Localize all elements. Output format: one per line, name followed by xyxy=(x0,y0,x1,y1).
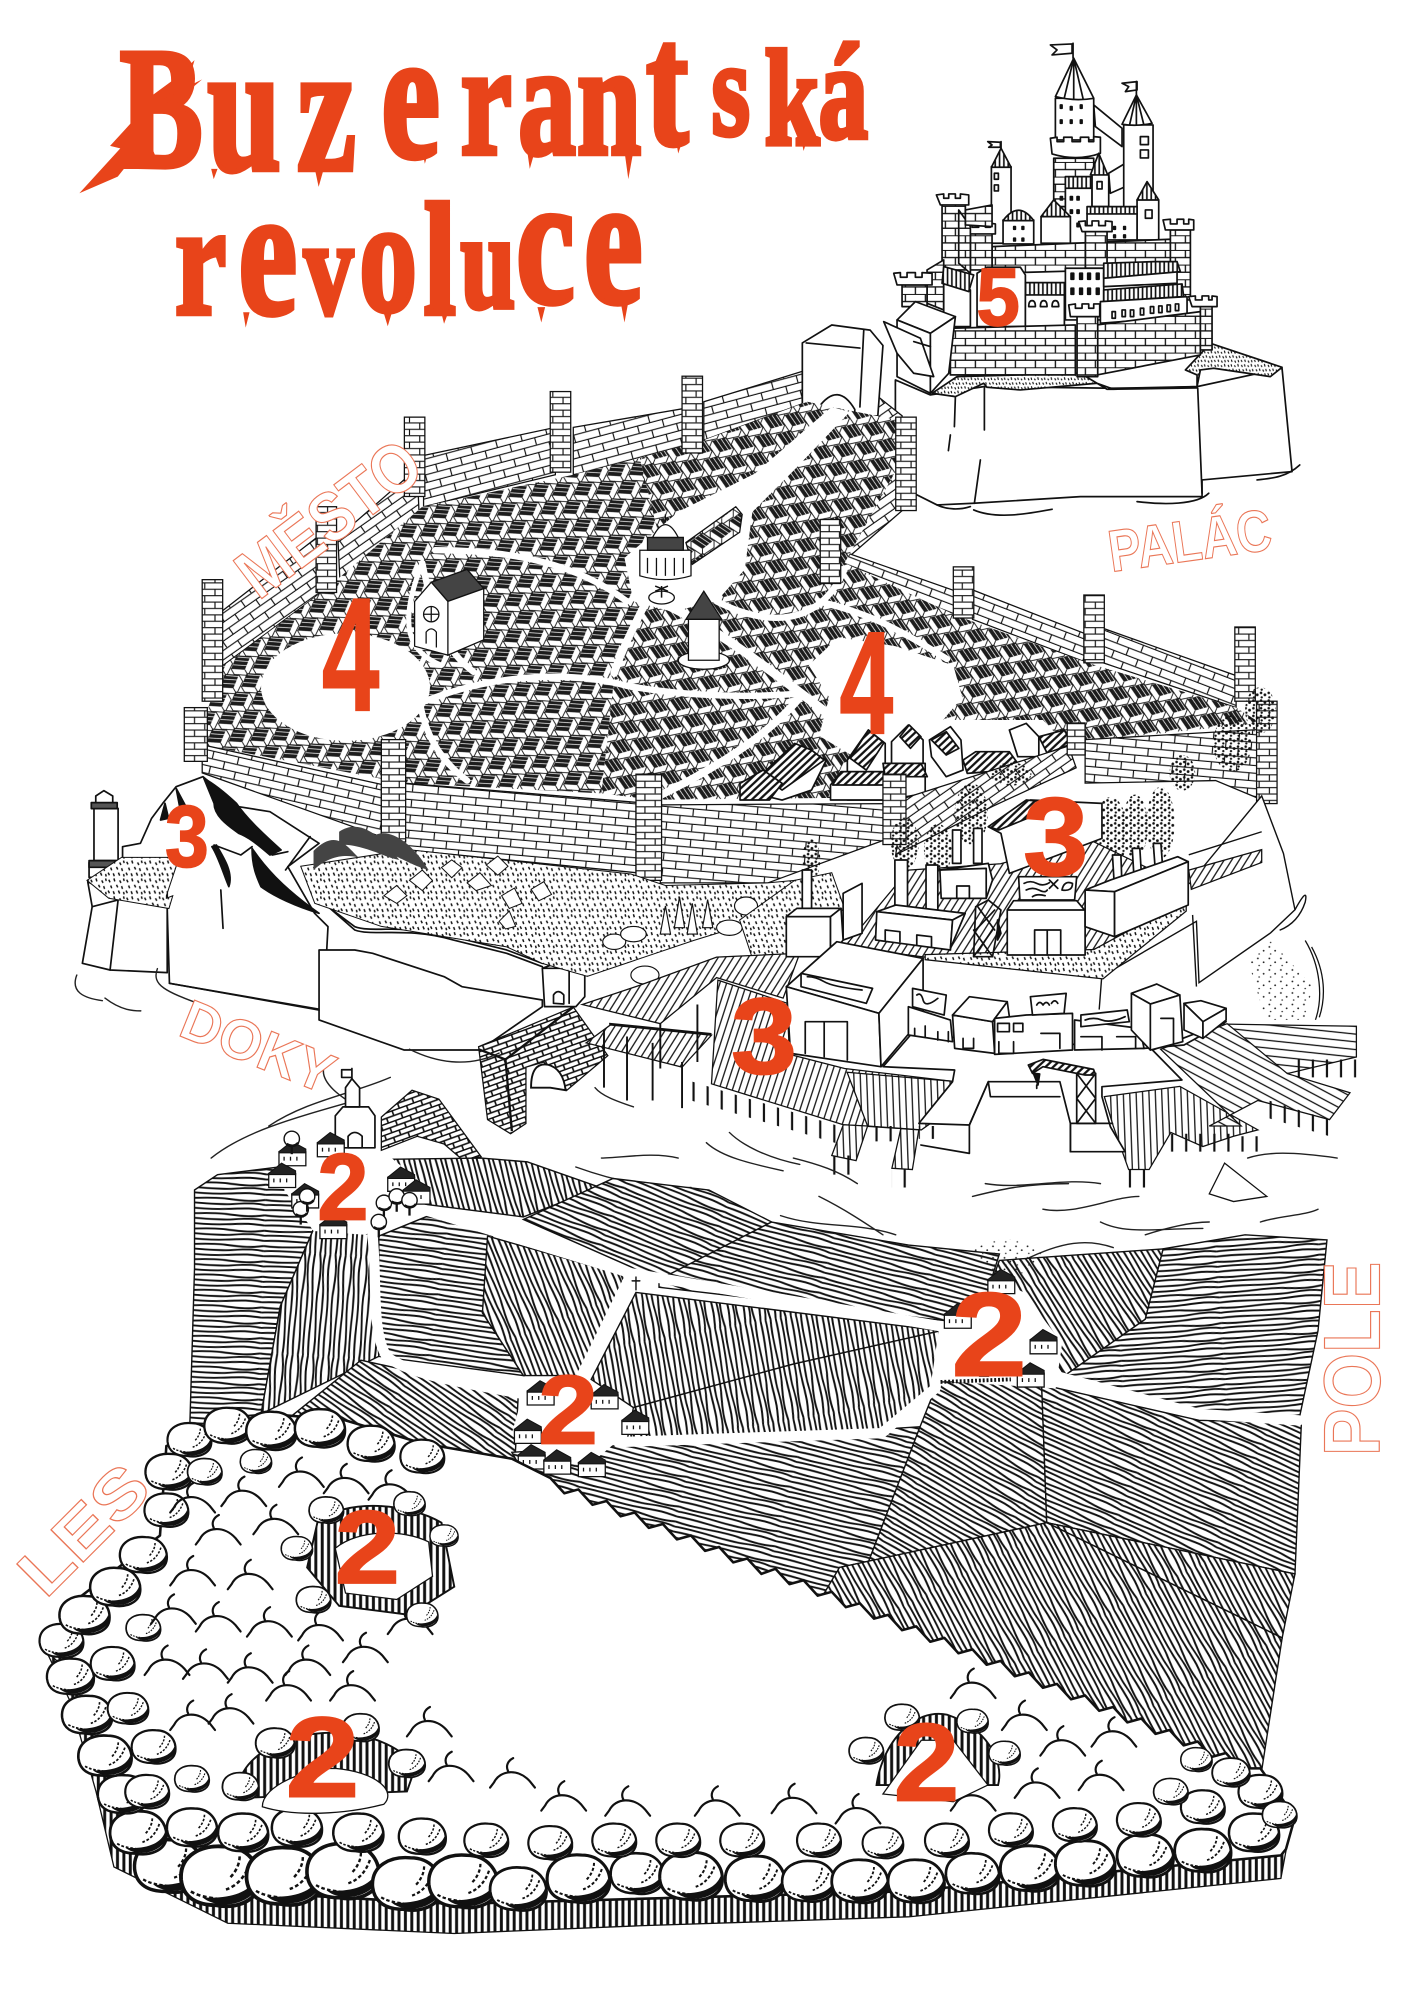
field: inner triangle xyxy=(591,1292,941,1408)
country roads xyxy=(372,1209,1299,1442)
church xyxy=(415,569,484,655)
fountain xyxy=(649,586,674,604)
far right dock xyxy=(1196,1024,1356,1074)
tents xyxy=(384,856,552,929)
city gatehouse xyxy=(802,325,883,422)
title line 2: r xyxy=(175,172,226,349)
castle lower buildings xyxy=(942,262,1187,327)
left square xyxy=(261,633,430,741)
field: crossroads west xyxy=(482,1236,631,1376)
forest canopy xyxy=(56,1414,1295,1904)
outlined region labels xyxy=(4,424,1396,1611)
number 3: factories: 3 xyxy=(1023,776,1088,900)
waterfront shops xyxy=(908,984,1226,1054)
central village houses xyxy=(514,1381,649,1477)
number 2: forest west: 2 xyxy=(335,1490,400,1605)
field: north shore xyxy=(388,1158,600,1217)
city landmarks xyxy=(415,514,729,669)
village clearing patches xyxy=(284,1145,1062,1465)
number 4: city west: 4 xyxy=(322,564,379,745)
left cliffs xyxy=(82,882,542,1050)
factory C xyxy=(940,863,993,898)
label: DOKY: DOKY xyxy=(172,987,344,1106)
back wall segments xyxy=(221,531,325,667)
field: north centre xyxy=(523,1179,772,1281)
field: west band xyxy=(189,1167,316,1440)
lighthouse xyxy=(89,791,123,877)
city smoke xyxy=(802,687,1276,880)
ice floe xyxy=(1209,1163,1267,1202)
factory ground hatching xyxy=(845,839,1186,960)
castle gate block xyxy=(884,302,955,393)
factory wall rear xyxy=(1085,729,1262,800)
north village houses xyxy=(269,1131,430,1239)
palace cliff and castle xyxy=(884,43,1300,515)
field: south centre xyxy=(512,1427,920,1606)
quay xyxy=(883,1022,1226,1153)
number 5: palace: 5 xyxy=(976,251,1020,342)
right square xyxy=(809,637,962,768)
east village houses xyxy=(941,1269,1057,1387)
forest clearing south west xyxy=(222,1714,425,1813)
label: POLE: POLE xyxy=(1307,1262,1396,1456)
promontory ground xyxy=(87,857,179,909)
forest clearing south east xyxy=(849,1704,1020,1802)
field: steep strip xyxy=(261,1223,379,1414)
number 4: city east: 4 xyxy=(840,602,893,765)
chimneys xyxy=(802,828,1163,912)
big warehouse xyxy=(786,942,923,1067)
mountain range xyxy=(123,777,328,1010)
stone bridges xyxy=(479,1007,608,1134)
right piers xyxy=(1104,1086,1258,1170)
lighthouse, cliffs and mountains xyxy=(82,777,585,1050)
title line 2: u xyxy=(461,185,515,337)
castle inner buildings xyxy=(991,105,1159,244)
title line 2: v xyxy=(304,192,354,343)
label: LES: LES xyxy=(4,1450,165,1611)
main dock xyxy=(711,980,952,1130)
factories and warehouses xyxy=(786,800,1226,1153)
factory A xyxy=(786,883,862,957)
red revolution stage numbers xyxy=(165,251,1088,1825)
field: south west xyxy=(262,1360,518,1472)
title drips xyxy=(211,138,807,328)
forest clearing west xyxy=(281,1492,458,1627)
dark roof cluster beside the dome xyxy=(686,507,742,564)
water ripple lines xyxy=(75,969,1337,1260)
right rooftops xyxy=(601,402,1260,800)
round tower xyxy=(678,591,729,669)
factory E xyxy=(1085,857,1188,937)
lower walkway xyxy=(925,900,1186,979)
front wall west xyxy=(202,745,381,837)
field: north east xyxy=(659,1222,999,1321)
field: village north xyxy=(983,1249,1163,1376)
title: Buzerantská revoluce xyxy=(79,0,868,354)
field: wedge xyxy=(1047,1523,1295,1638)
crater stipple xyxy=(1249,940,1313,1020)
harbour crane xyxy=(1028,1059,1096,1123)
city back walls xyxy=(221,370,1236,708)
field: inner lower xyxy=(627,1331,941,1441)
label: PALÁC: PALÁC xyxy=(1104,497,1276,585)
factory D with sign xyxy=(1007,877,1085,955)
title line 2: ce xyxy=(516,138,643,342)
villages xyxy=(269,1068,1062,1477)
forest xyxy=(40,1408,1297,1933)
title flame swoosh of letter B xyxy=(79,60,202,193)
factory wall diagonal xyxy=(896,746,1076,855)
steam at shore xyxy=(973,1239,1043,1273)
field: lower east xyxy=(819,1523,1282,1779)
mountain foothills xyxy=(314,827,429,870)
roadside stipple xyxy=(740,873,845,966)
city interior: dense rooftops xyxy=(202,402,1260,800)
treetop tree outlines along the rim xyxy=(40,1408,1297,1910)
title line 2: e xyxy=(238,149,297,354)
field: south east xyxy=(1042,1385,1301,1574)
left rooftops xyxy=(202,458,665,793)
trees along the road xyxy=(603,897,758,984)
front wall east xyxy=(660,804,889,883)
forest skirt xyxy=(46,1651,1290,1933)
dock gate tower xyxy=(542,942,585,1007)
title line 2: ol xyxy=(359,169,456,349)
farmland fields xyxy=(189,1158,1327,1779)
castle battlement walls xyxy=(894,194,1194,310)
streets and squares xyxy=(261,407,962,796)
dock pilings xyxy=(691,1081,843,1145)
city front walls and towers xyxy=(184,376,1277,883)
number 2: forest south west: 2 xyxy=(285,1695,360,1821)
title line 1: ská xyxy=(712,13,868,174)
castle outer wall with towers xyxy=(950,296,1217,377)
palace cliff xyxy=(895,368,1292,505)
front wall centre xyxy=(404,783,636,873)
domed cathedral xyxy=(640,514,691,580)
field: centre west xyxy=(379,1213,523,1376)
palace ground stipple xyxy=(932,343,1282,397)
right cliff xyxy=(1094,796,1295,983)
north village tower xyxy=(335,1068,375,1148)
city towers xyxy=(184,376,1277,880)
road cross marker xyxy=(632,1277,640,1290)
label: MĚSTO: MĚSTO xyxy=(221,424,436,613)
factory B xyxy=(876,905,965,950)
number 3: mountains: 3 xyxy=(165,787,209,885)
support posts xyxy=(604,1004,711,1108)
houses below right square xyxy=(740,720,1072,800)
title line 1: B xyxy=(120,13,203,204)
factory district ground and cliffs xyxy=(381,796,1356,1202)
dock decks xyxy=(582,953,800,1024)
main street from the gate xyxy=(624,407,850,612)
castle main towers xyxy=(988,43,1153,210)
walkway strip xyxy=(1189,850,1262,889)
number 3: docks: 3 xyxy=(731,977,797,1096)
back dotted factory xyxy=(988,800,1102,873)
number 2: east village: 2 xyxy=(951,1268,1027,1402)
field: south slope xyxy=(839,1382,1047,1567)
cliff cracks and water lines xyxy=(937,388,1300,515)
treetop scribbles xyxy=(145,1457,1136,1823)
field: far east xyxy=(1065,1235,1327,1420)
number 2: central village: 2 xyxy=(538,1355,598,1464)
number 2: forest south east: 2 xyxy=(894,1702,959,1825)
main dock piers xyxy=(832,1125,868,1161)
stipple ground below the city xyxy=(87,827,795,984)
number 2: north village: 2 xyxy=(317,1134,368,1240)
title line 1: ran xyxy=(461,12,641,189)
crane, factory yard xyxy=(974,900,1001,957)
